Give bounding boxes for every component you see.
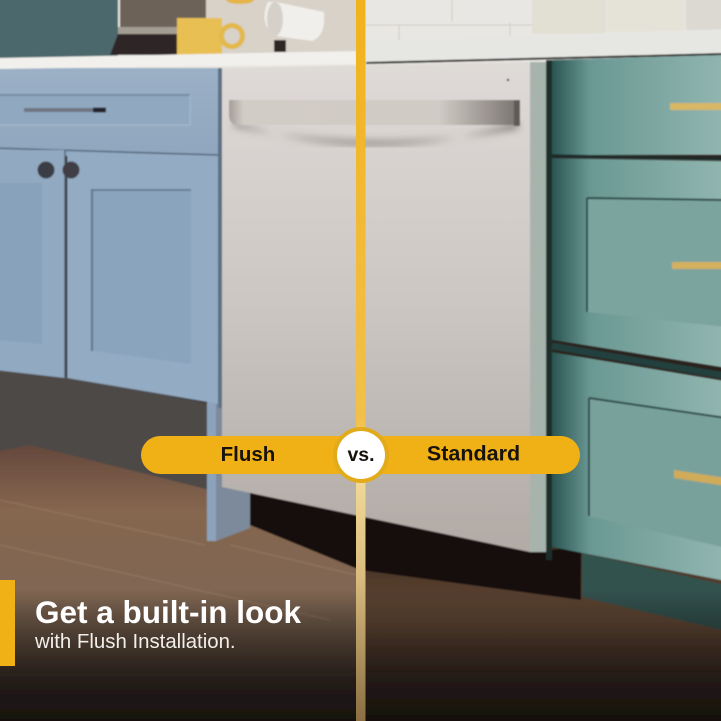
dishwasher	[222, 62, 546, 552]
yellow accent bar	[0, 580, 15, 666]
countertop left	[0, 51, 356, 69]
door knobs	[38, 162, 80, 178]
green cabinets	[546, 55, 721, 631]
vs badge	[333, 427, 389, 483]
ceramic canisters	[532, 0, 721, 34]
background wall	[0, 0, 721, 85]
countertop right	[366, 29, 721, 63]
divider line	[356, 0, 366, 721]
shadow under blue cabinets	[0, 365, 218, 492]
icon: yellow mug	[177, 18, 242, 55]
headline: Get a built-in look	[35, 594, 301, 630]
blue cabinets	[0, 68, 222, 408]
gold drawer handles	[670, 103, 721, 486]
icon: white mug	[226, 0, 324, 52]
coffee maker	[110, 0, 206, 55]
toe kick shadow	[250, 490, 581, 600]
floor	[0, 430, 721, 721]
label: standard: Standard	[427, 442, 520, 466]
caption	[34, 594, 301, 653]
dishwasher handle	[229, 79, 520, 145]
label: flush: Flush	[221, 443, 275, 466]
drawer handle	[24, 108, 106, 112]
vs badge: vs.	[347, 444, 375, 466]
bottom dark gradient	[0, 590, 721, 721]
comparison pill	[141, 427, 580, 483]
subheading: with Flush Installation.	[34, 631, 236, 653]
cabinet foot panel	[207, 400, 250, 541]
